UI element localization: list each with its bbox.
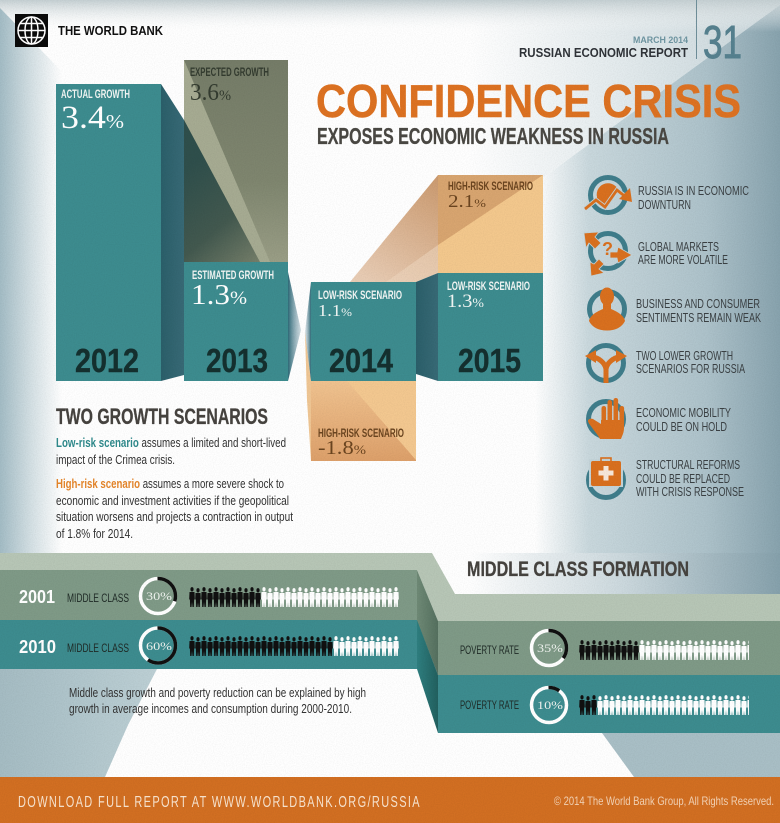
text: volatile markets: ARE MORE VOLATILE xyxy=(638,252,728,267)
footer xyxy=(0,777,780,823)
band: 2010: MIDDLE CLASS xyxy=(67,643,129,655)
2014 low-risk bar: LOW-RISK SCENARIO xyxy=(318,290,402,302)
2013 expected growth bar: 3.6% xyxy=(190,80,231,106)
2015 low-risk bar: 2015 xyxy=(458,342,521,379)
text: mobility: ECONOMIC MOBILITY xyxy=(636,405,731,420)
2014 left side face xyxy=(305,282,311,381)
2015 low-risk bar xyxy=(438,273,543,381)
panel: middle class formation xyxy=(0,553,780,733)
heading: middle class formation: MIDDLE CLASS FORMATION xyxy=(467,558,689,581)
2014 to 2015 side face xyxy=(416,273,438,381)
download link text: DOWNLOAD FULL REPORT AT WWW.WORLDBANK.ORG/RUSSIA xyxy=(18,794,421,811)
report header xyxy=(519,0,742,68)
band: 2010 xyxy=(0,620,417,669)
2015 high-risk bar xyxy=(438,175,543,273)
text: downturn: DOWNTURN xyxy=(638,197,691,212)
scenarios text: of 1.8% for 2014. xyxy=(56,527,133,541)
ring 35%: 35% xyxy=(537,641,563,655)
explanatory text xyxy=(69,686,366,716)
2012 actual growth bar: 3.4% xyxy=(61,100,124,136)
2015 high-risk bar: 2.1 % xyxy=(448,191,486,211)
logo wordmark: THE WORLD BANK xyxy=(58,24,163,38)
2014 high-risk bar xyxy=(305,332,416,461)
2015 low-risk bar: 1.3% xyxy=(447,291,484,312)
band: 2010: 2010 xyxy=(19,637,56,657)
text: sentiments xyxy=(636,296,761,325)
2015 high-risk bar: HIGH-RISK SCENARIO xyxy=(448,181,533,193)
2014 low-risk bar xyxy=(311,282,416,381)
band: 2001 xyxy=(0,570,417,620)
2014 high-risk bar: HIGH-RISK SCENARIO xyxy=(318,428,404,440)
2013 estimated growth bar xyxy=(184,262,288,381)
ring 35% xyxy=(532,630,566,666)
text: reforms xyxy=(636,457,744,499)
band top face xyxy=(0,553,780,621)
band: poverty 35%: POVERTY RATE xyxy=(460,645,519,657)
title: CONFIDENCE CRISIS xyxy=(316,75,741,127)
people row 2010 xyxy=(189,636,399,656)
2013 expected growth bar xyxy=(184,60,288,262)
explanatory text: growth in average incomes and consumption during 2000-2010. xyxy=(69,702,352,716)
text: reforms: COULD BE REPLACED xyxy=(636,471,730,486)
text: mobility xyxy=(636,405,731,434)
2014 low-risk bar: 1.1% xyxy=(318,301,352,320)
2013 estimated growth bar: 2013 xyxy=(206,342,268,379)
scenarios text: situation worsens and projects a contraction in output xyxy=(56,510,293,524)
2012 actual growth bar xyxy=(56,84,161,381)
band: 2001: 2001 xyxy=(19,587,55,607)
bar chart: growth by year xyxy=(56,60,543,461)
scenarios text xyxy=(56,436,293,541)
2015 low-risk bar: LOW-RISK SCENARIO xyxy=(447,281,530,293)
icon: economic downturn xyxy=(585,178,632,212)
band: poverty 10%: POVERTY RATE xyxy=(460,700,519,712)
people row poverty 10% xyxy=(579,695,749,715)
band: poverty 10% xyxy=(438,675,780,733)
2015 high-risk side face xyxy=(350,175,438,282)
people row poverty 35% xyxy=(579,640,749,660)
band: 2001: MIDDLE CLASS xyxy=(67,593,129,605)
report header: MARCH 2014 xyxy=(633,35,689,46)
band: poverty 35% xyxy=(438,621,780,675)
scenarios heading: TWO GROWTH SCENARIOS xyxy=(56,404,268,429)
scenarios text: economic and investment activities if the geopolitical xyxy=(56,494,289,508)
explanatory text: Middle class growth and poverty reduction can be explained by high xyxy=(69,686,366,700)
report header: 31 xyxy=(703,16,742,68)
ring 30% xyxy=(140,578,176,614)
2012 actual growth bar: 2012 xyxy=(75,342,139,379)
2013 side face xyxy=(288,272,301,381)
text: downturn xyxy=(638,183,749,212)
band side faces xyxy=(417,570,438,733)
scenarios text: Low-risk scenario assumes a limited and short-lived xyxy=(56,436,286,450)
icon: hand xyxy=(588,398,624,439)
2013 expected growth bar: EXPECTED GROWTH xyxy=(190,67,269,79)
2013 estimated growth bar: ESTIMATED GROWTH xyxy=(192,270,274,282)
ring 60%: 60% xyxy=(146,639,172,653)
scenarios text: High-risk scenario assumes a more severe shock to xyxy=(56,477,284,491)
2013 estimated growth bar: 1.3% xyxy=(191,279,247,311)
logo: The World Bank xyxy=(15,14,163,47)
2012 side face xyxy=(161,84,184,381)
ring 60% xyxy=(140,628,176,663)
icon: person xyxy=(589,288,625,330)
text: mobility: COULD BE ON HOLD xyxy=(636,419,727,434)
scenarios text: impact of the Crimea crisis. xyxy=(56,453,175,467)
text: two scenarios: TWO LOWER GROWTH xyxy=(636,348,733,363)
ring 10% xyxy=(532,688,566,722)
2014 high-risk bar: -1.8 % xyxy=(318,437,366,459)
icon: fork arrows xyxy=(585,346,627,383)
panel: key messages xyxy=(584,178,761,499)
ring 10%: 10% xyxy=(537,698,563,712)
text: two scenarios xyxy=(636,348,745,376)
2014 low-risk bar: 2014 xyxy=(329,342,394,379)
icon: first-aid kit xyxy=(588,458,624,498)
text: volatile markets: GLOBAL MARKETS xyxy=(638,239,719,254)
icon: volatile markets xyxy=(584,232,632,276)
report header: RUSSIAN ECONOMIC REPORT xyxy=(519,46,688,60)
ring 30%: 30% xyxy=(146,589,172,603)
icon: volatile markets: ? xyxy=(602,239,613,259)
2012 actual growth bar: ACTUAL GROWTH xyxy=(61,89,130,101)
panel: two growth scenarios xyxy=(56,404,293,541)
people row 2001 xyxy=(189,587,399,607)
text: volatile markets xyxy=(638,239,728,267)
